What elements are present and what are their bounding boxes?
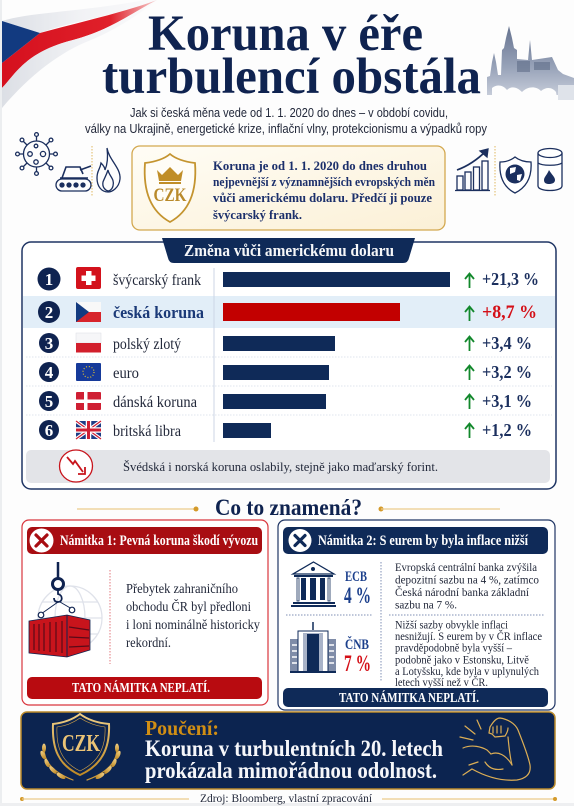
- row 5: Danish krone: [39, 391, 532, 411]
- objection 2 text: inflation: [395, 618, 542, 689]
- row 5: Danish krone: +3,1 %: [482, 391, 532, 411]
- objection 2 text: inflation: nesnižují. S eurem by v ČR inflace: [395, 629, 542, 643]
- objection 1 header: Námitka 1: Pevná koruna škodí vývozu: [60, 533, 258, 549]
- objection 1 text: i loni nominálně historicky: [126, 618, 260, 633]
- icon: oil barrel: [538, 148, 562, 190]
- ECB rate: ECB: [345, 569, 367, 585]
- callout text: Koruna je od 1. 1. 2020 do dnes druhou: [213, 158, 427, 173]
- panel: change against the US dollar: [22, 238, 556, 489]
- icon: Prague castle: [487, 26, 574, 104]
- lesson text: Koruna v turbulentních 20. letech: [145, 736, 443, 761]
- source line: [20, 793, 557, 805]
- objection 2 text: inflation: a Lotyšsku, kde byla v uplynulých: [395, 664, 539, 678]
- panel heading: Změna vůči americkému dolaru: [184, 241, 394, 260]
- objection 1 text: Přebytek zahraničního: [126, 582, 238, 597]
- row 4: euro: 4: [45, 363, 54, 382]
- icon: CZK shield with laurels: [39, 714, 122, 780]
- objection 2 text: rates: depozitní sazbu na 4 %, zatímco: [395, 572, 539, 586]
- objection 2 text: inflation: letech vyšší než v ČR.: [395, 675, 488, 689]
- note: weakened currencies: Švédská i norská koruna oslabily, stejně jako maďarský forint.: [123, 459, 438, 474]
- icon: tank: [56, 166, 91, 191]
- subtitle: [85, 106, 488, 136]
- icon: Polish flag: [76, 333, 101, 352]
- row 5: Danish krone: 5: [45, 392, 53, 411]
- icon: falling arrow: [60, 450, 92, 482]
- panel: lesson: [21, 712, 555, 789]
- objection 1 text: [126, 582, 260, 651]
- objection 2 header: Námitka 2: S eurem by byla inflace nižší: [318, 533, 529, 549]
- row 6: British pound: [39, 420, 532, 440]
- objection 2 text: inflation: pravděpodobně byla vyšší –: [395, 640, 513, 654]
- objection 2 header: [283, 527, 548, 554]
- callout text: vůči americkému dolaru. Předčí ji pouze: [213, 190, 432, 205]
- heading: what it means: [77, 495, 500, 520]
- row 1: Swiss franc: švýcarský frank: [113, 272, 201, 289]
- callout: key message: [132, 146, 445, 230]
- ECB rate: 4 %: [344, 583, 371, 608]
- row 3: Polish zloty: polský zlotý: [113, 336, 181, 353]
- objection 2 text: rates: [395, 560, 539, 612]
- lesson text: prokázala mimořádnou odolnost.: [145, 758, 437, 783]
- row 6: British pound: 6: [45, 421, 53, 440]
- row 5: Danish krone: dánská koruna: [113, 394, 197, 411]
- icon: EU flag: [76, 363, 101, 381]
- title: [102, 6, 481, 105]
- icon: Swiss flag: [76, 267, 101, 289]
- icon: CZK shield: CZK: [154, 185, 187, 206]
- panel heading: [162, 238, 415, 263]
- CNB rate: 7 %: [344, 651, 371, 676]
- icon: container on crane over globe: [29, 562, 102, 657]
- row 3: Polish zloty: +3,4 %: [482, 333, 532, 353]
- callout text: [213, 158, 436, 222]
- objection 1 verdict: [27, 677, 262, 699]
- objection 1 text: obchodu ČR byl předloni: [126, 598, 251, 615]
- row 2: Czech koruna: česká koruna: [113, 303, 204, 322]
- title: Koruna v éře: [148, 6, 423, 62]
- panel: objection 2: [278, 520, 555, 710]
- icon: ECB temple: [291, 562, 336, 607]
- heading: what it means: Co to znamená?: [215, 495, 362, 520]
- objection 2 verdict: TATO NÁMITKA NEPLATÍ.: [339, 690, 479, 705]
- objection 1 text: rekordní.: [126, 636, 171, 651]
- icon: virus: [16, 133, 57, 175]
- lesson text: Poučení:: [145, 716, 219, 740]
- objection 2 text: rates: sazbu na 7 %.: [395, 598, 457, 612]
- row 2: Czech koruna: [38, 301, 537, 323]
- row 3: Polish zloty: 3: [45, 334, 53, 353]
- row 1: Swiss franc: 1: [45, 270, 53, 289]
- row 4: euro: [39, 362, 532, 382]
- subtitle: války na Ukrajině, energetické krize, inflační vlny, protekcionismu a výpadků ropy: [85, 122, 488, 136]
- source line: Zdroj: Bloomberg, vlastní zpracování: [200, 793, 373, 805]
- icon: growth chart: [455, 149, 490, 190]
- icon: CNB building: [290, 622, 336, 673]
- objection 2 verdict: [283, 688, 548, 707]
- icon: Czech flag ribbon: [2, 0, 157, 108]
- callout text: nejpevnější z významnějších evropských měn: [213, 174, 436, 189]
- icon: flexed arm: [460, 718, 530, 780]
- panel: objection 1: [22, 520, 268, 705]
- lesson text: [145, 716, 443, 783]
- objection 1 header: [27, 527, 262, 554]
- objection 2 text: inflation: Nižší sazby obvykle inflaci: [395, 618, 509, 632]
- row 2: Czech koruna: +8,7 %: [482, 302, 537, 323]
- row 3: Polish zloty: [39, 333, 532, 353]
- icon: CZK shield with laurels: CZK: [62, 731, 100, 757]
- ECB rate: [291, 562, 371, 608]
- icon: globe shield: [500, 157, 531, 193]
- icon: Danish flag: [76, 392, 101, 410]
- row 4: euro: euro: [113, 365, 139, 382]
- subtitle: Jak si česká měna vede od 1. 1. 2020 do dnes – v období covidu,: [130, 106, 448, 120]
- icon: UK flag: [76, 421, 101, 439]
- row 2: Czech koruna: 2: [45, 303, 53, 322]
- objection 2 text: rates: Evropská centrální banka zvýšila: [395, 560, 538, 574]
- CNB rate: ČNB: [345, 636, 369, 653]
- row 6: British pound: +1,2 %: [482, 420, 532, 440]
- row 4: euro: +3,2 %: [482, 362, 532, 382]
- objection 2 text: inflation: podobně jako v Estonsku, Litvě: [395, 652, 529, 666]
- icon: Czech flag: [76, 302, 101, 322]
- callout text: švýcarský frank.: [213, 207, 302, 222]
- icon: flame: [97, 148, 120, 192]
- icon: CZK shield: [145, 154, 195, 222]
- row 1: Swiss franc: +21,3 %: [482, 269, 539, 289]
- objection 2 text: rates: Česká národní banka základní: [395, 585, 530, 599]
- note: weakened currencies: [26, 450, 550, 483]
- objection 1 verdict: TATO NÁMITKA NEPLATÍ.: [72, 680, 210, 695]
- title: turbulencí obstála: [102, 49, 481, 105]
- row 6: British pound: britská libra: [113, 423, 181, 440]
- row 1: Swiss franc: [38, 267, 539, 290]
- CNB rate: [290, 622, 371, 676]
